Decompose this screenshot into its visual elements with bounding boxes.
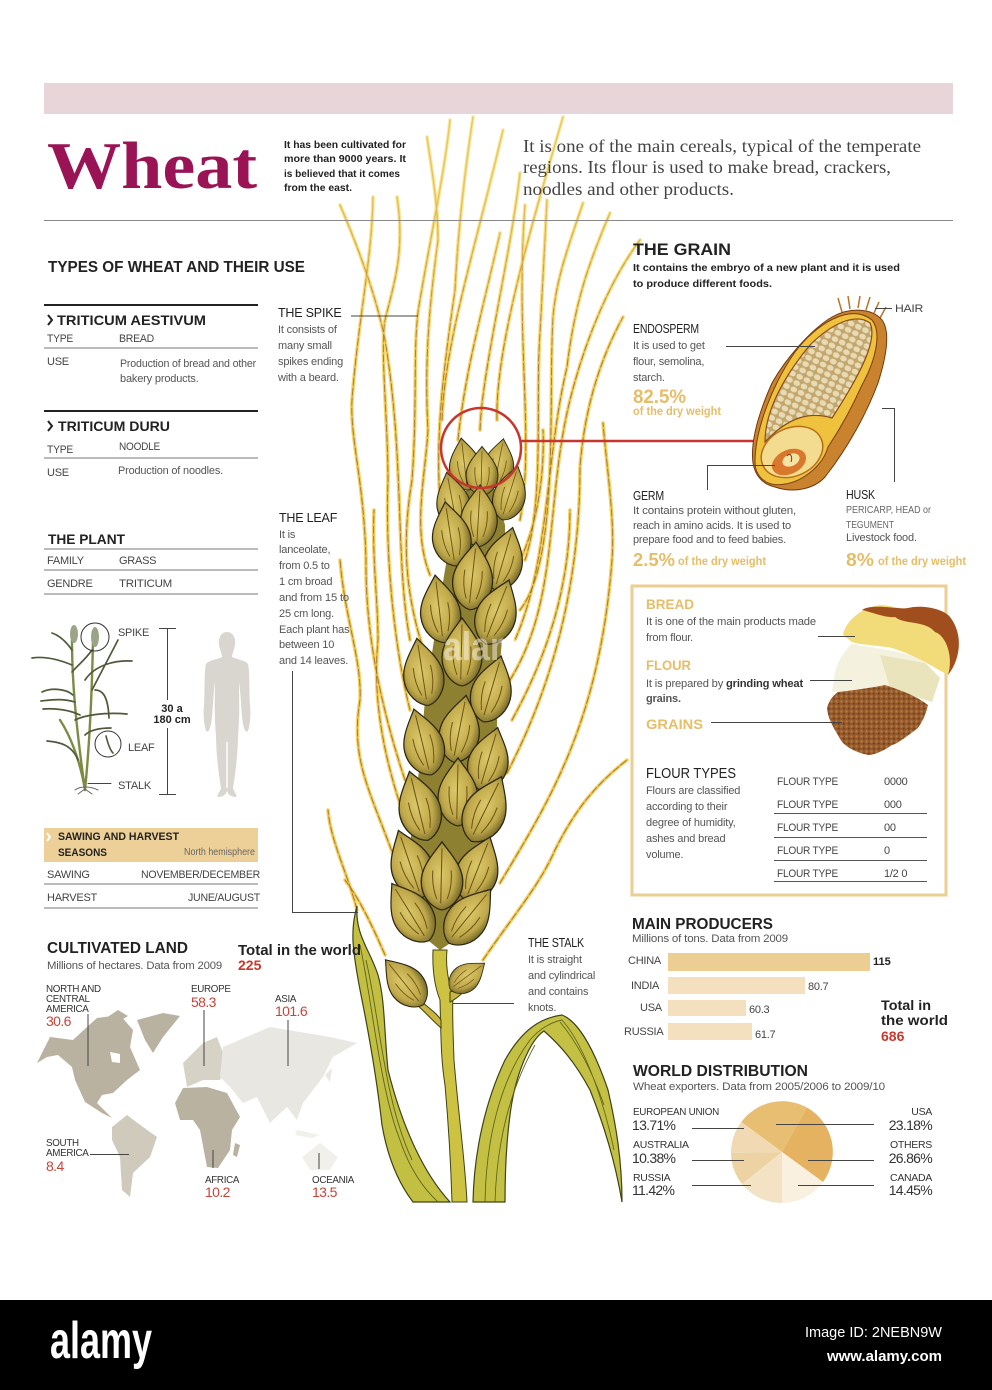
plant labels (118, 627, 155, 792)
panel: types of wheat: USE (47, 356, 69, 368)
panel: main producers (624, 916, 948, 1044)
callout: the leaf (279, 511, 358, 912)
plant labels: STALK (118, 780, 152, 792)
stalk (416, 950, 472, 1202)
flour types text: ashes and bread (646, 833, 725, 845)
label: endosperm (633, 322, 815, 418)
footer bar: www.alamy.com (826, 1348, 942, 1365)
map labels (46, 984, 355, 1200)
intro serif text (523, 136, 921, 199)
bar chart: 80.7 (808, 981, 829, 993)
watermark on spike: alam (443, 625, 520, 669)
awns (328, 117, 640, 960)
callout: the leaf: between 10 (279, 639, 334, 651)
callout: the stalk: knots. (528, 1002, 556, 1014)
callout: the leaf: 25 cm long. (279, 608, 334, 620)
label: flour (646, 657, 852, 705)
label: endosperm: of the dry weight (633, 406, 721, 418)
heading: world distribution: WORLD DISTRIBUTION (633, 1063, 808, 1080)
flour types text: Flours are classified (646, 785, 740, 797)
pie labels right: 14.45% (889, 1182, 932, 1198)
bar chart: 60.3 (749, 1004, 770, 1016)
total in the world (238, 943, 361, 973)
illustration: bread, flour and grains (827, 605, 959, 755)
plant labels: SPIKE (118, 627, 149, 639)
flour types text: volume. (646, 849, 683, 861)
callout: the stalk: THE STALK (528, 936, 585, 950)
flour types table: FLOUR TYPE (777, 776, 838, 788)
label: grains: GRAINS (646, 716, 703, 732)
panel: sawing and harvest seasons: HARVEST (47, 892, 98, 904)
flour types table (774, 776, 927, 882)
pie labels right: 26.86% (889, 1150, 932, 1166)
heading: cultivated land: CULTIVATED LAND (47, 940, 188, 957)
flour types table: FLOUR TYPE (777, 868, 838, 880)
map labels: ASIA (275, 994, 297, 1005)
flour types table: 0000 (884, 776, 908, 788)
panel: types of wheat: bakery products. (120, 373, 199, 385)
intro serif text: noodles and other products. (523, 179, 734, 199)
label: husk: PERICARP, HEAD or (846, 505, 932, 516)
arched leaf (473, 1015, 622, 1202)
icon: wheat plant (32, 623, 132, 794)
intro short text: from the east. (284, 182, 352, 194)
heading: the grain: THE GRAIN (633, 240, 731, 259)
footer bar: Image ID: 2NEBN9W (805, 1325, 942, 1341)
icon: wheat grain cross-section (752, 296, 887, 490)
callout: the leaf: from 0.5 to (279, 560, 330, 572)
bar chart: 115 (873, 956, 891, 968)
total in the world (881, 997, 948, 1044)
map labels: 30.6 (46, 1013, 72, 1029)
label: flour: FLOUR (646, 657, 691, 673)
callout: the stalk: It is straight (528, 954, 582, 966)
panel: cultivated land: Millions of hectares. Data from 2009 (47, 960, 222, 972)
height ruler: 30 a (161, 703, 184, 715)
flour types table: FLOUR TYPE (777, 845, 838, 857)
panel: types of wheat: TRITICUM AESTIVUM (57, 312, 206, 328)
icon: human silhouette (204, 632, 250, 797)
panel: the plant: GENDRE (47, 578, 93, 590)
label: hair: HAIR (895, 303, 923, 315)
callout: the spike: with a beard. (277, 372, 339, 384)
heading: types of wheat: TYPES OF WHEAT AND THEIR USE (48, 259, 305, 276)
panel: the plant: GRASS (119, 555, 156, 567)
chevron (48, 315, 52, 325)
flour types table: 1/2 0 (884, 868, 907, 880)
panel: sawing and harvest seasons: NOVEMBER/DECEMBER (141, 869, 260, 881)
map labels: 58.3 (191, 994, 217, 1010)
grain intro: It contains the embryo of a new plant and it is used (633, 262, 900, 274)
label: husk: of the dry weight (878, 556, 966, 568)
heading: the plant: THE PLANT (48, 531, 125, 547)
grain intro (633, 262, 900, 290)
title: Wheat (47, 129, 258, 203)
label: germ: 2.5% (633, 550, 675, 570)
pie labels right: OTHERS (890, 1139, 932, 1151)
map labels: 13.5 (312, 1184, 338, 1200)
callout: the leaf: 1 cm broad (279, 576, 332, 588)
label: husk (846, 408, 966, 570)
spikelets (372, 436, 533, 1016)
label: endosperm: starch. (633, 372, 665, 384)
flour types table: 00 (884, 822, 896, 834)
label: bread: from flour. (646, 632, 693, 644)
panel: sawing and harvest seasons (44, 828, 261, 908)
map labels: 10.2 (205, 1184, 231, 1200)
seasons header: North hemisphere (184, 847, 255, 858)
label: husk: TEGUMENT (846, 520, 894, 531)
pie labels right: 23.18% (889, 1117, 932, 1133)
label: germ: It contains protein without gluten, (633, 505, 796, 517)
pie labels left: RUSSIA (633, 1172, 671, 1184)
bar chart: CHINA (628, 955, 662, 967)
panel: world distribution: Wheat exporters. Data from 2005/2006 to 2009/10 (633, 1081, 885, 1093)
callout: the spike (277, 306, 418, 384)
total in the world: 225 (238, 957, 262, 973)
callout: the spike: many small (278, 340, 332, 352)
panel: types of wheat (44, 259, 305, 479)
label: endosperm: ENDOSPERM (633, 322, 699, 336)
seasons header: SAWING AND HARVEST (58, 831, 179, 843)
map labels: AFRICA (205, 1175, 240, 1186)
callout: the spike: spikes ending (278, 356, 343, 368)
pie chart (692, 1101, 874, 1203)
map labels: SOUTH (46, 1138, 79, 1149)
wheat illustration (328, 117, 640, 1202)
label: germ (633, 466, 796, 570)
label: flour: grains. (646, 693, 681, 705)
bar chart: 61.7 (755, 1029, 776, 1041)
red magnifier circle and connector (441, 408, 755, 488)
total in the world: Total in (881, 997, 931, 1013)
panel: the plant: TRITICUM (119, 578, 172, 590)
bar chart: USA (640, 1002, 663, 1014)
panel: cultivated land (37, 940, 361, 1200)
seasons header (44, 828, 258, 862)
panel: the plant: FAMILY (47, 555, 85, 567)
map labels: AMERICA (46, 1148, 89, 1159)
panel: types of wheat: USE (47, 467, 69, 479)
label: bread: It is one of the main products made (646, 616, 816, 628)
grain intro: to produce different foods. (633, 278, 772, 290)
panel: types of wheat: NOODLE (119, 441, 160, 453)
callout: the stalk: and contains (528, 986, 589, 998)
map labels: OCEANIA (312, 1175, 355, 1186)
label: endosperm: 82.5% (633, 387, 686, 408)
total in the world: the world (881, 1012, 948, 1028)
label: husk: Livestock food. (846, 532, 917, 544)
label: flour: It is prepared by grinding wheat (646, 678, 804, 690)
map labels: 101.6 (275, 1003, 308, 1019)
bar chart (624, 953, 891, 1041)
map labels: CENTRAL (46, 994, 90, 1005)
callout: the leaf: and 14 leaves. (279, 655, 348, 667)
pie labels right (889, 1106, 932, 1198)
panel: types of wheat: Production of bread and other (120, 358, 256, 370)
callout: the leaf: Each plant has (279, 624, 350, 636)
panel: sawing and harvest seasons: SAWING (47, 869, 90, 881)
panel: main producers: Millions of tons. Data from 2009 (632, 933, 788, 945)
bar chart: RUSSIA (624, 1026, 664, 1038)
panel: types of wheat: TYPE (47, 333, 73, 345)
pie labels left: EUROPEAN UNION (633, 1106, 719, 1118)
label: germ: GERM (633, 489, 664, 503)
map labels: EUROPE (191, 984, 231, 995)
callout: the stalk (453, 936, 595, 1014)
intro serif text: regions. Its flour is used to make bread, crackers, (523, 157, 891, 177)
panel: the grain (633, 240, 966, 570)
label: germ: reach in amino acids. It is used to (633, 520, 791, 532)
label: husk: HUSK (846, 488, 876, 502)
flour types text (646, 766, 740, 861)
pie labels left: 10.38% (632, 1150, 676, 1166)
flour types table: FLOUR TYPE (777, 799, 838, 811)
lower left leaf (353, 906, 450, 1202)
pink header band (44, 83, 953, 114)
label: bread (646, 596, 855, 644)
intro short text: It has been cultivated for (284, 139, 406, 151)
panel: types of wheat: TYPE (47, 444, 73, 456)
flour types text: FLOUR TYPES (646, 766, 736, 782)
pie labels right: USA (911, 1106, 932, 1118)
pie labels right: CANADA (890, 1172, 932, 1184)
flour types text: according to their (646, 801, 728, 813)
callout: the spike: It consists of (278, 324, 338, 336)
panel: sawing and harvest seasons: JUNE/AUGUST (188, 892, 261, 904)
label: endosperm: flour, semolina, (633, 356, 704, 368)
panel: types of wheat: BREAD (119, 333, 154, 345)
callout: the spike: THE SPIKE (278, 306, 342, 320)
heading: main producers: MAIN PRODUCERS (632, 916, 773, 933)
flour types text: degree of humidity, (646, 817, 736, 829)
panel: world distribution (632, 1063, 932, 1203)
panel: flour products box (632, 586, 959, 895)
label: germ: prepare food and to feed babies. (633, 534, 786, 546)
label: endosperm: It is used to get (633, 340, 705, 352)
chevron (48, 421, 52, 431)
height ruler: 180 cm (153, 714, 191, 726)
pie labels left: 13.71% (632, 1117, 676, 1133)
panel: types of wheat: Production of noodles. (118, 465, 223, 477)
intro short text (284, 139, 406, 194)
label: hair (875, 303, 923, 315)
callout: the leaf: It is (279, 529, 296, 541)
total in the world: 686 (881, 1028, 905, 1044)
bar chart: INDIA (631, 980, 660, 992)
pie labels left: 11.42% (632, 1182, 674, 1198)
map labels: AMERICA (46, 1004, 89, 1015)
footer bar: alamy (50, 1312, 152, 1370)
label: germ: of the dry weight (678, 556, 766, 568)
callout: the leaf: lanceolate, (279, 544, 330, 556)
flour types table: 0 (884, 845, 890, 857)
pie labels left (632, 1106, 719, 1198)
map labels: NORTH AND (46, 984, 101, 995)
map labels: 8.4 (46, 1158, 64, 1174)
callout: the stalk: and cylindrical (528, 970, 595, 982)
panel: the plant (32, 531, 258, 797)
total in the world: Total in the world (238, 943, 361, 959)
callout: the leaf: and from 15 to (279, 592, 349, 604)
intro serif text: It is one of the main cereals, typical of the temperate (523, 136, 921, 156)
plant labels: LEAF (128, 742, 155, 754)
intro short text: is believed that it comes (284, 168, 400, 180)
footer bar (0, 1300, 992, 1390)
pie labels left: AUSTRALIA (633, 1139, 689, 1151)
seasons header: SEASONS (58, 847, 107, 859)
label: bread: BREAD (646, 596, 694, 612)
flour types table: FLOUR TYPE (777, 822, 838, 834)
callout: the leaf: THE LEAF (279, 511, 338, 525)
world map (37, 1010, 357, 1197)
height ruler (153, 628, 191, 794)
intro short text: more than 9000 years. It (284, 153, 406, 165)
panel: types of wheat: TRITICUM DURU (58, 418, 170, 434)
label: husk: 8% (846, 550, 874, 570)
flour types table: 000 (884, 799, 902, 811)
